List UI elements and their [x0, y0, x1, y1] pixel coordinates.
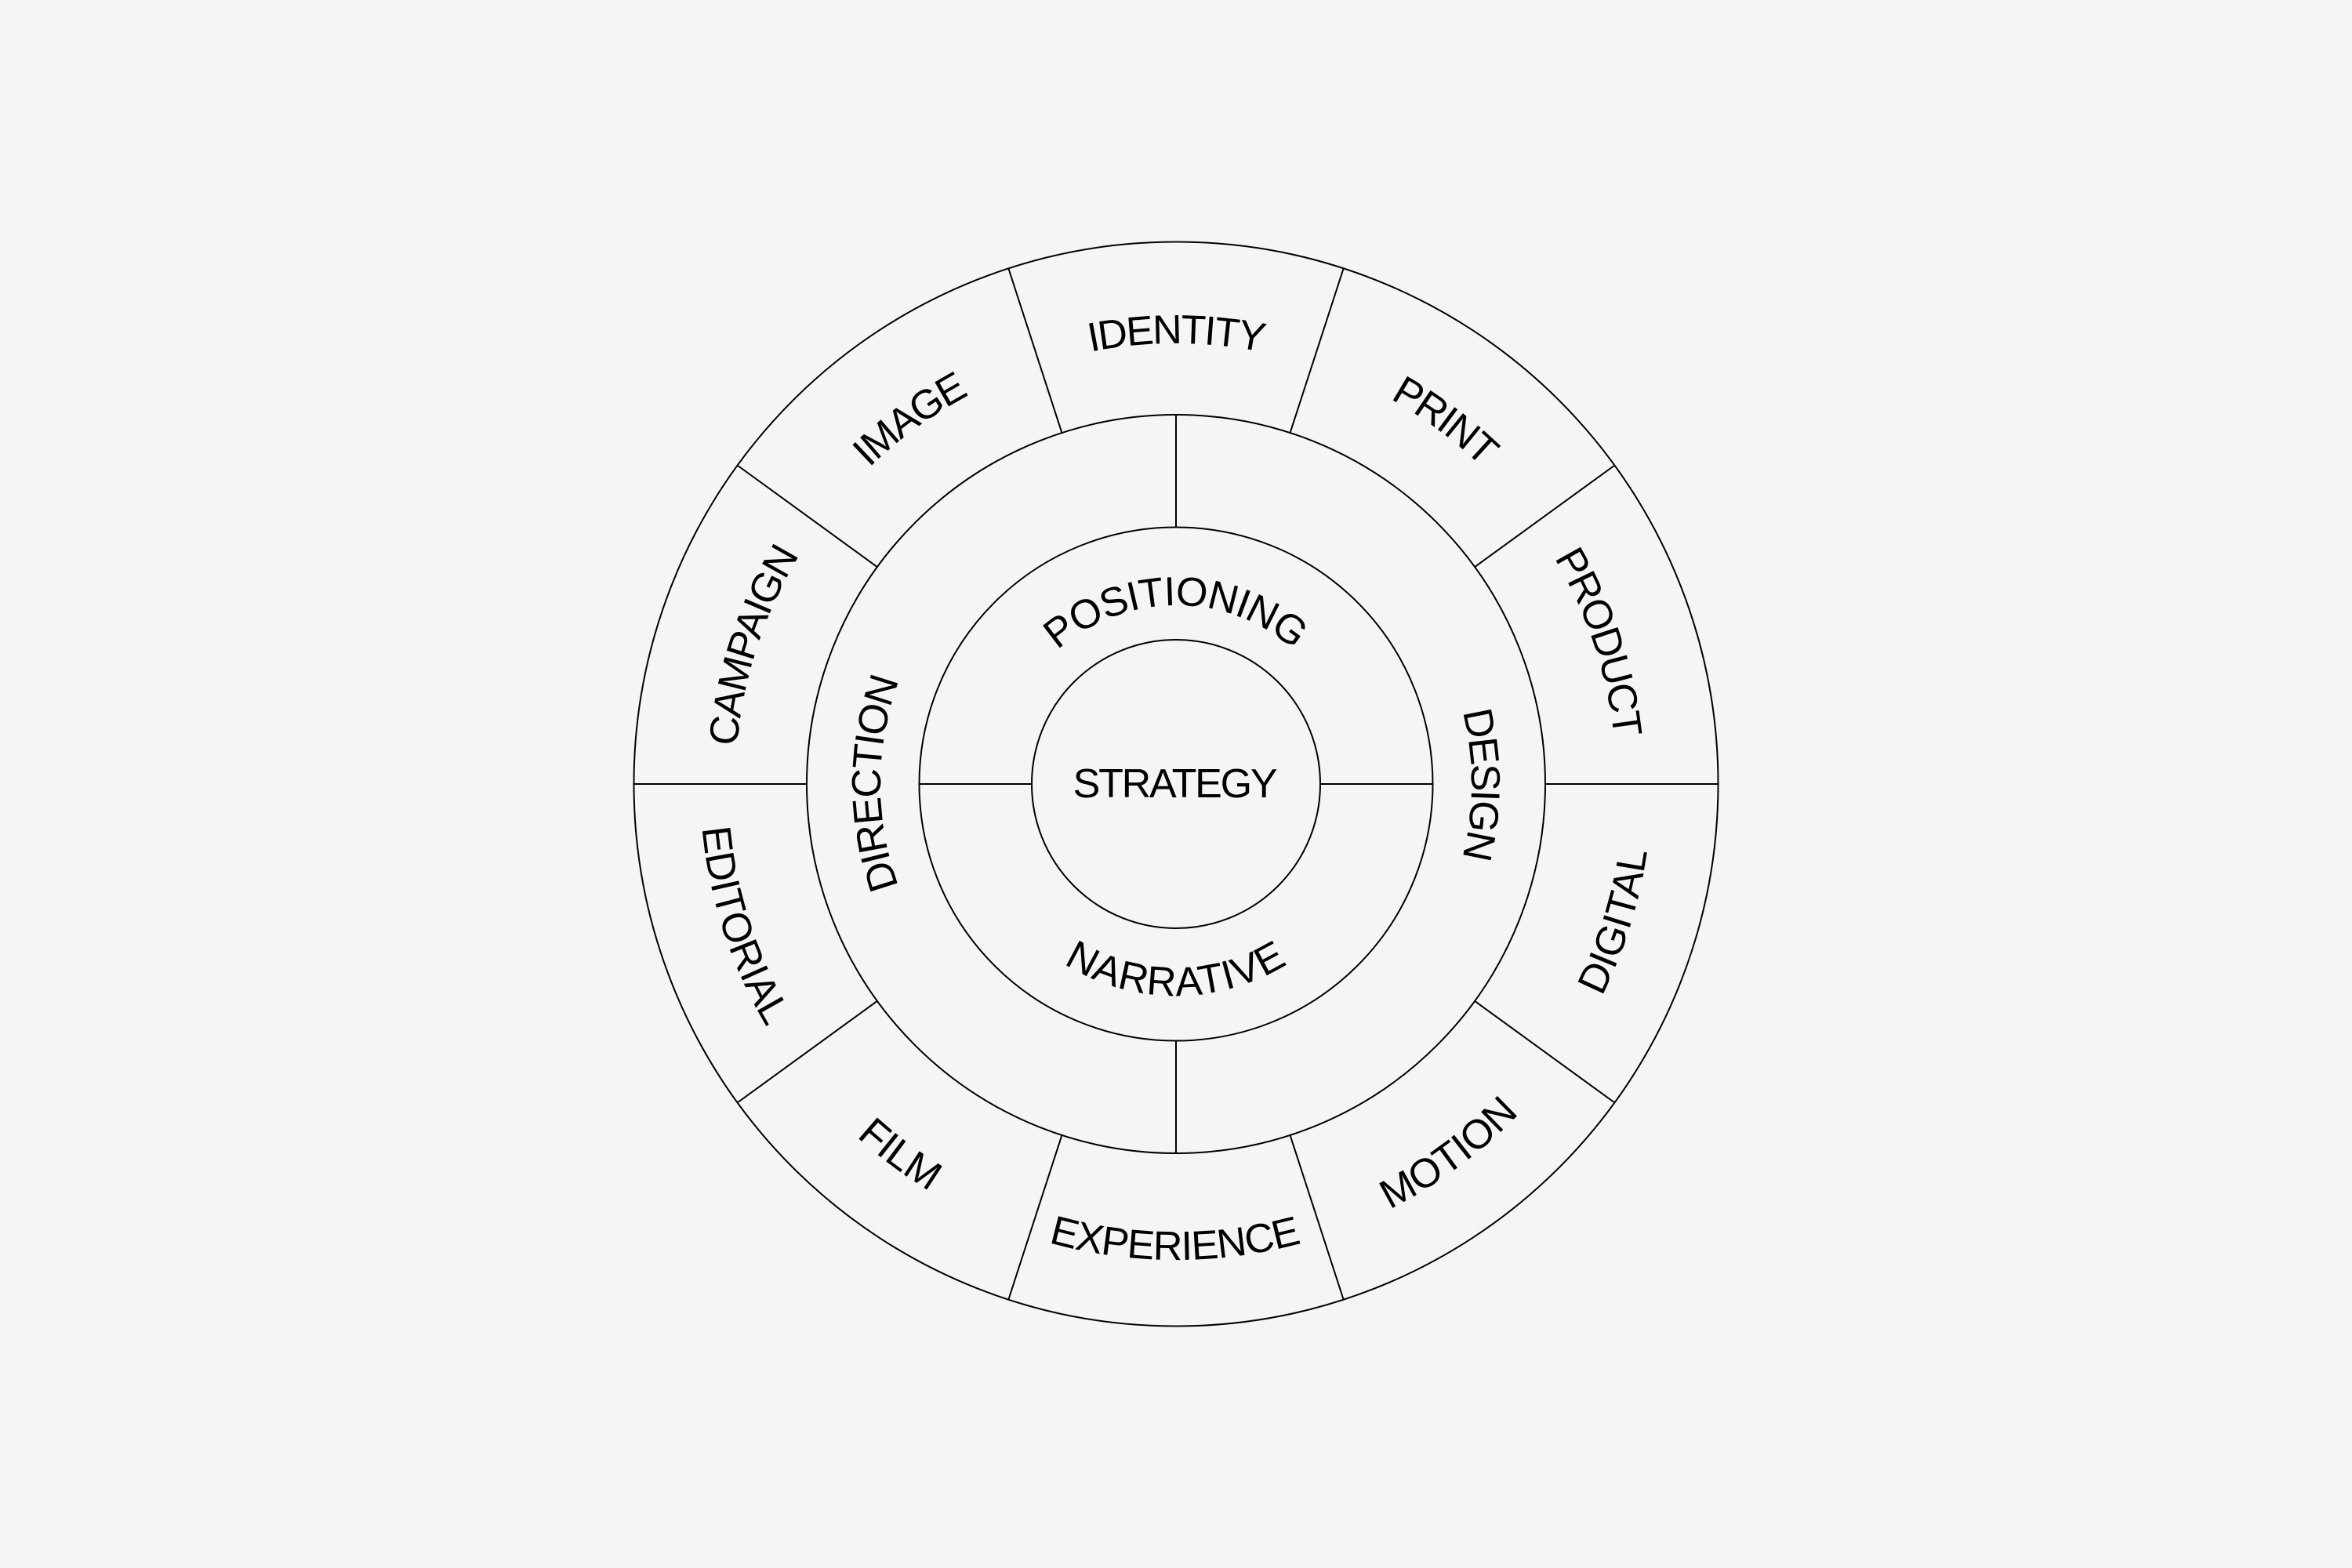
spokes: inner ring: [919, 783, 1433, 785]
middle ring label: direction: DIRECTION: [851, 674, 898, 892]
outer ring label: editorial: EDITORIAL: [702, 828, 784, 1026]
outer ring label: experience: EXPERIENCE: [1051, 1216, 1300, 1261]
spokes: outer ring: [633, 268, 1719, 1300]
outer ring label: identity: IDENTITY: [1089, 315, 1267, 351]
concentric rings: [633, 241, 1719, 1327]
outer ring label: motion: MOTION: [1379, 1096, 1517, 1208]
inner ring label: positioning: POSITIONING: [1043, 577, 1305, 648]
outer ring label: product: PRODUCT: [1555, 547, 1642, 734]
outer ring label: digital: DIGITAL: [1577, 851, 1647, 994]
centre label: strategy: STRATEGY: [1073, 761, 1277, 807]
inner ring label: narrative: NARRATIVE: [1066, 941, 1287, 996]
outer ring label: film: FILM: [859, 1118, 942, 1190]
outer ring label: campaign: CAMPAIGN: [710, 544, 798, 743]
outer ring label: print: PRINT: [1392, 376, 1501, 460]
middle ring label: design: DESIGN: [1463, 709, 1501, 861]
outer ring label: image: IMAGE: [853, 372, 967, 466]
spokes: middle ring: [1175, 415, 1177, 1153]
